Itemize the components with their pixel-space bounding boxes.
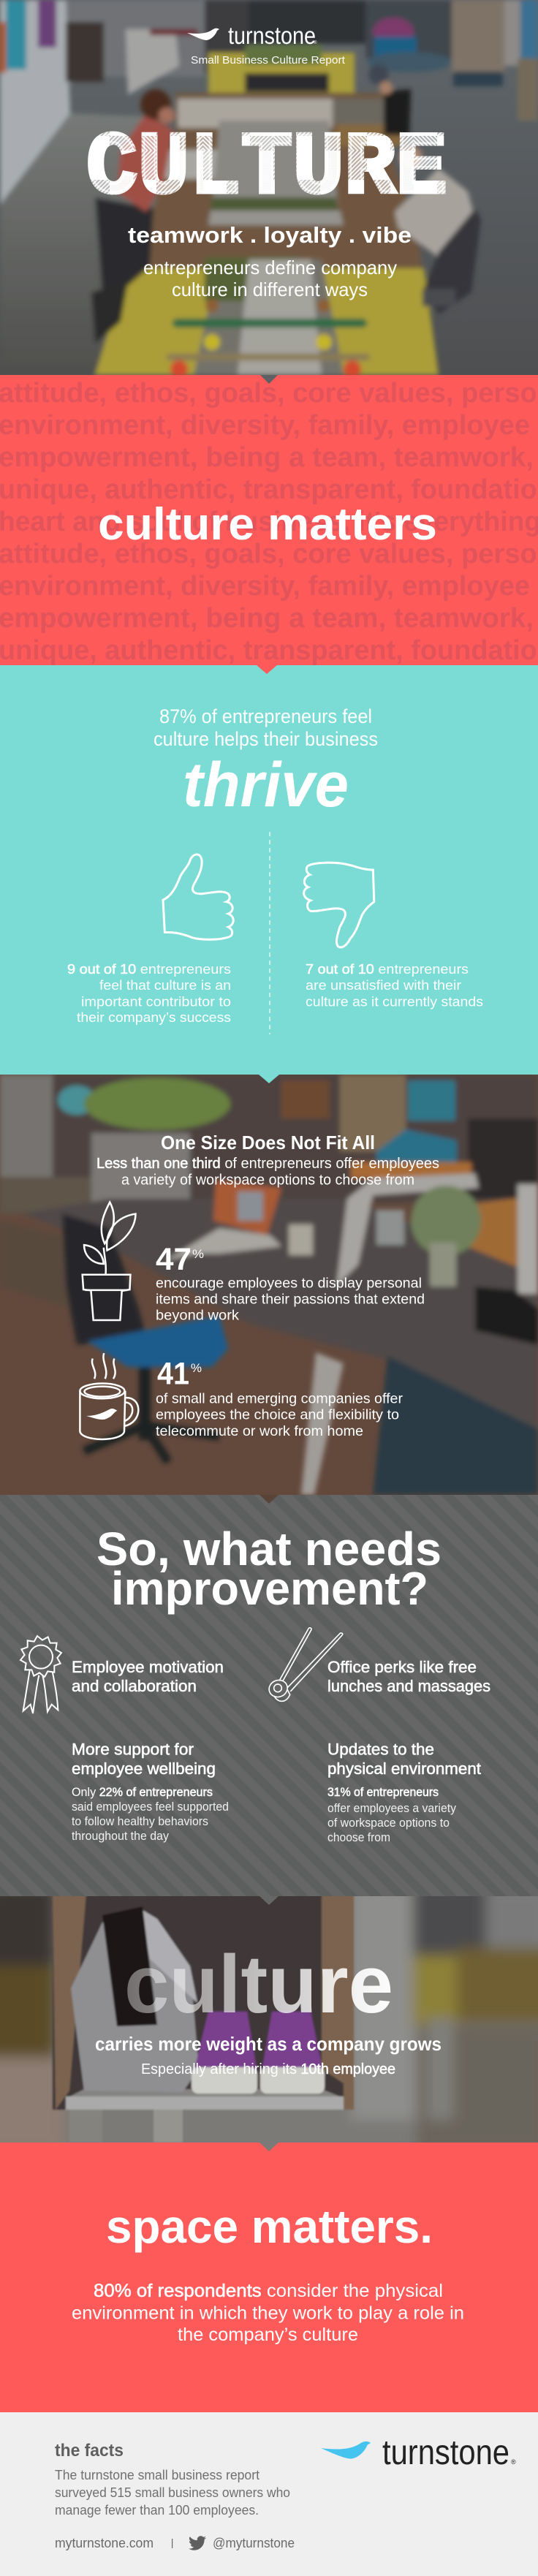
panel: thrive: [0, 665, 538, 1075]
twitter handle: @myturnstone: [213, 2535, 295, 2550]
intro text: culture helps their business: [154, 728, 378, 750]
item: physical environment: Updates to the: [327, 1740, 434, 1759]
hero subtitle: culture in different ways: [172, 279, 368, 300]
item: motivation: and collaboration: [72, 1677, 197, 1695]
facts text: surveyed 515 small business owners who: [55, 2485, 290, 2500]
panel: space matters: [0, 2143, 538, 2412]
item: physical environment: choose from: [327, 1831, 390, 1844]
icon: thumbs down: [304, 863, 374, 947]
arrow: section notch: [259, 1495, 279, 1504]
word cloud background: empowerment, being a team, teamwork,: [0, 442, 534, 473]
item: physical environment: 31% of entrepreneurs: [327, 1786, 439, 1799]
icon: twitter: [189, 2536, 206, 2550]
panel: culture carries weight: [0, 1886, 538, 2153]
word cloud background: environment, diversity, family, employee: [0, 410, 530, 441]
hero subtitle: entrepreneurs define company: [143, 257, 397, 279]
text: 9 out of 10: important contributor to: [81, 994, 231, 1009]
item: physical environment: physical environment: [327, 1759, 481, 1778]
hero subtitle: [143, 257, 397, 300]
item: office perks: lunches and massages: [327, 1677, 490, 1695]
title: CULTURE: CULTURE: [86, 119, 447, 219]
body text: 80% of respondents consider the physical: [94, 2281, 443, 2301]
item: physical environment: [327, 1740, 481, 1844]
facts text: [55, 2467, 290, 2518]
stat: 47%: [156, 1242, 425, 1323]
text: 7 out of 10: are unsatisfied with their: [306, 977, 461, 993]
item: wellbeing: to follow healthy behaviors: [72, 1815, 208, 1828]
intro text: a variety of workspace options to choose from: [121, 1173, 414, 1189]
intro text: [96, 1156, 439, 1189]
panel: hero: [0, 0, 538, 378]
note: 10th employee: Especially after hiring its 10th employee: [141, 2061, 395, 2077]
website: myturnstone.com: [55, 2535, 154, 2550]
item: motivation: [72, 1658, 224, 1695]
heading: [96, 1523, 442, 1615]
desk photo: [0, 1075, 538, 1495]
logo: turnstone: turnstone: [228, 22, 316, 49]
body text: [72, 2281, 464, 2345]
word cloud background: environment, diversity, family, employee: [0, 571, 530, 602]
icon: award ribbon: [20, 1636, 61, 1713]
stat: 47%: %: [192, 1247, 204, 1261]
heading: improvement?: [111, 1562, 428, 1615]
text: 7 out of 10: [306, 961, 483, 1009]
heading: culture: culture: [124, 1939, 393, 2030]
word cloud background: attitude, ethos, goals, core values, person: [0, 539, 538, 569]
item: motivation: Employee motivation: [72, 1658, 224, 1676]
heading: thrive: thrive: [183, 750, 349, 820]
text: 9 out of 10: their company’s success: [77, 1009, 231, 1025]
word cloud background: attitude, ethos, goals, core values, person: [0, 378, 538, 409]
stat: 41%: 41: [157, 1357, 189, 1392]
word cloud background: empowerment, being a team, teamwork,: [0, 603, 534, 634]
word cloud background: [0, 378, 538, 666]
icon: blue bird: [321, 2441, 371, 2459]
tagline: teamwork . loyalty . vibe: [128, 222, 412, 248]
item: wellbeing: employee wellbeing: [72, 1759, 216, 1778]
body text: the company’s culture: [178, 2325, 358, 2345]
item: office perks: [327, 1658, 490, 1695]
stat: 41%: [156, 1357, 404, 1439]
item: wellbeing: said employees feel supported: [72, 1800, 229, 1814]
icon: plant: [83, 1202, 135, 1320]
panel: culture matters: [0, 375, 538, 666]
cubby photo: [0, 1886, 538, 2153]
intro text: [154, 705, 378, 750]
arrow: section notch: [260, 375, 278, 384]
icon: chopsticks and sushi: [267, 1628, 343, 1701]
stat: 41%: of small and emerging companies offer: [156, 1390, 404, 1406]
item: office perks: Office perks like free: [327, 1658, 477, 1676]
panel: footer: [0, 2412, 538, 2576]
heading: One Size Does Not Fit All: [161, 1132, 375, 1153]
stat: 47%: 47: [156, 1242, 192, 1277]
text: 7 out of 10: 7 out of 10 entrepreneurs: [306, 961, 469, 977]
stat: 47%: encourage employees to display personal: [156, 1275, 422, 1291]
hero office photo: [0, 0, 538, 378]
item: physical environment: of workspace options to: [327, 1817, 450, 1830]
intro text: 87% of entrepreneurs feel: [159, 705, 372, 727]
text: 9 out of 10: [67, 961, 231, 1025]
item: wellbeing: Only 22% of entrepreneurs: [72, 1786, 213, 1799]
arrow: section notch: [259, 1896, 279, 1905]
facts text: The turnstone small business report: [55, 2467, 259, 2482]
panel: what needs improvement: [0, 1495, 538, 1896]
logo: turnstone footer: ®: [511, 2458, 516, 2466]
facts text: manage fewer than 100 employees.: [55, 2502, 259, 2518]
icon: thumbs up: [163, 855, 233, 939]
report label: Small Business Culture Report: [191, 55, 345, 67]
heading: culture matters: culture matters: [98, 499, 437, 550]
text: 7 out of 10: culture as it currently stands: [306, 994, 483, 1009]
intro text: Less than one third of entrepreneurs offer employees: [96, 1156, 439, 1172]
stat: 47%: items and share their passions that extend: [156, 1292, 425, 1308]
stat: 41%: employees the choice and flexibility to: [156, 1407, 399, 1423]
item: physical environment: offer employees a variety: [327, 1802, 457, 1815]
text: 9 out of 10: 9 out of 10 entrepreneurs: [67, 961, 231, 977]
logo: turnstone footer: turnstone: [382, 2433, 509, 2472]
subheading: carries more weight as a company grows: [95, 2033, 442, 2055]
text: 9 out of 10: feel that culture is an: [99, 977, 231, 993]
stat: 41%: %: [191, 1361, 202, 1375]
stat: 47%: beyond work: [156, 1307, 239, 1323]
icon: coffee mug: [80, 1353, 138, 1439]
body text: environment in which they work to play a role in: [72, 2303, 464, 2323]
logo: turnstone: ®: [314, 40, 317, 45]
heading: the facts: the facts: [55, 2441, 124, 2461]
stat: 41%: telecommute or work from home: [156, 1423, 363, 1439]
arrow: section notch: [259, 2143, 279, 2151]
word cloud background: heart and soul of business, it's everything: [0, 507, 538, 537]
heading: So, what needs: [96, 1523, 442, 1575]
logo: turnstone footer: [321, 2433, 516, 2472]
arrow: section notch: [259, 1075, 279, 1083]
item: wellbeing: [72, 1740, 229, 1843]
item: wellbeing: throughout the day: [72, 1830, 170, 1843]
icon: bird: [187, 29, 219, 40]
logo: turnstone: [187, 22, 317, 49]
heading: space matters.: [106, 2200, 433, 2253]
item: wellbeing: More support for: [72, 1740, 194, 1759]
panel: one size does not fit all: [0, 1075, 538, 1495]
arrow: section notch: [257, 665, 277, 674]
